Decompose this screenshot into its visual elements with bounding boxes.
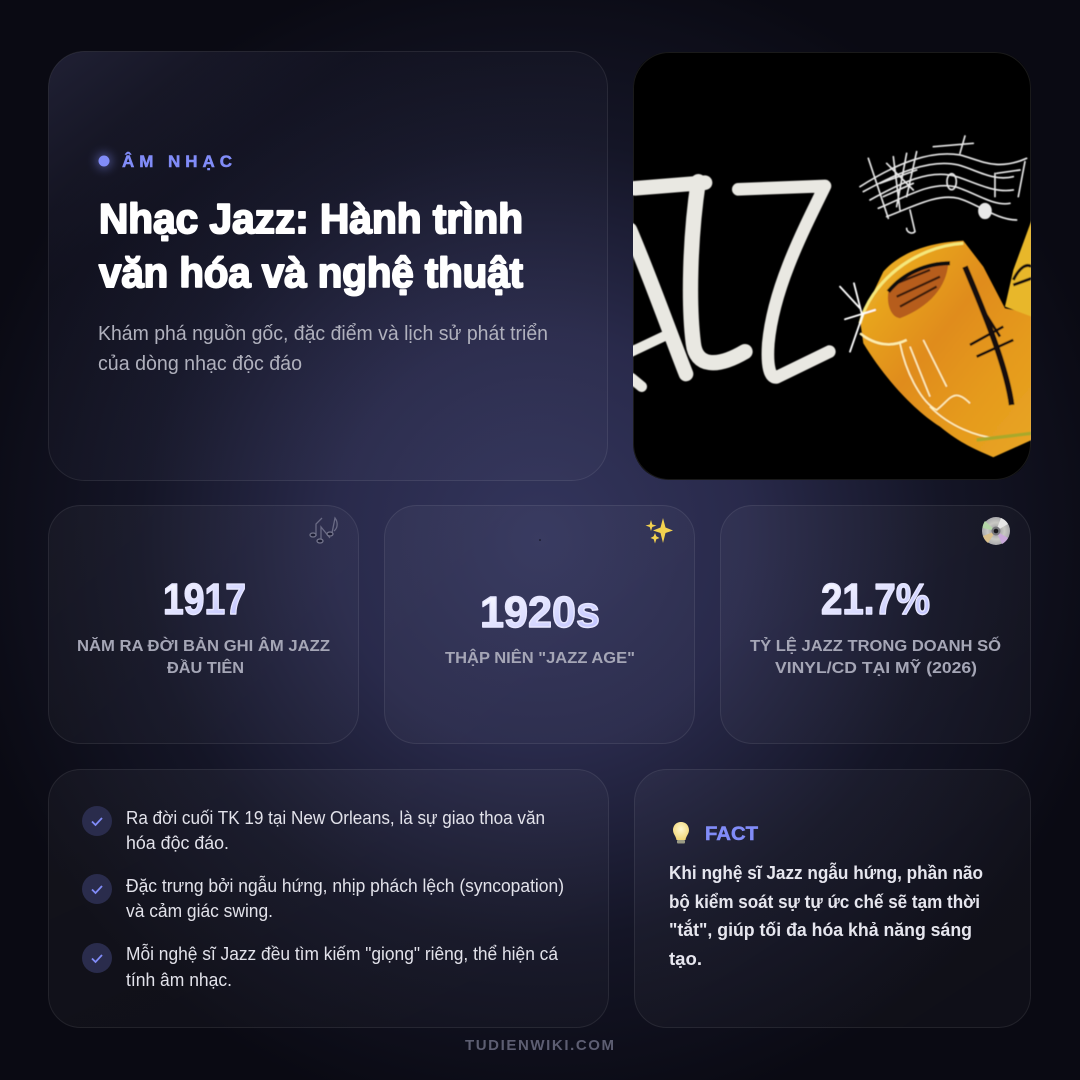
stat label: THẬP NIÊN "JAZZ AGE" <box>445 648 635 667</box>
stat label: VINYL/CD TẠI MỸ (2026) <box>775 657 977 677</box>
stat label <box>77 636 330 677</box>
subtitle: của dòng nhạc độc đáo <box>98 353 302 375</box>
panel: stat 1920s <box>384 506 694 744</box>
icon: sparkles <box>646 518 673 544</box>
list item 2: Đặc trưng bởi ngẫu hứng, nhịp phách lệch (syncopation) <box>126 875 564 896</box>
fact text: bộ kiểm soát sự tự ức chế sẽ tạm thời <box>669 892 980 912</box>
title <box>99 195 523 296</box>
sparkle <box>840 283 875 352</box>
tiny speck <box>539 539 541 541</box>
list item 3: tính âm nhạc. <box>126 970 232 990</box>
panel: stat 21.7% <box>720 506 1030 744</box>
image panel border <box>634 52 1030 480</box>
fact heading: FACT <box>705 824 758 845</box>
stat label: TỶ LỆ JAZZ TRONG DOANH SỐ <box>750 635 1001 655</box>
stat value: 21.7% <box>821 575 930 624</box>
stat value: 1920s <box>480 588 600 637</box>
icon: light bulb <box>673 822 689 844</box>
list item 2 <box>82 874 564 921</box>
panel: stat 1917 <box>48 506 358 744</box>
icon: musical notes <box>310 518 337 543</box>
stat label <box>750 635 1001 677</box>
list item 1 <box>82 806 545 853</box>
stat value: 1917 <box>163 575 246 624</box>
fact text: Khi nghệ sĩ Jazz ngẫu hứng, phần não <box>669 862 983 883</box>
subtitle <box>98 323 548 375</box>
panel: jazz illustration <box>630 52 1032 480</box>
fact text: "tắt", giúp tối đa hóa khả năng sáng <box>669 919 972 940</box>
saxophone bell <box>860 220 1032 457</box>
panel: fact <box>634 770 1030 1028</box>
lettering: ALZ <box>630 182 829 387</box>
footer source: TUDIENWIKI.COM <box>465 1037 614 1054</box>
stat label: NĂM RA ĐỜI BẢN GHI ÂM JAZZ <box>77 636 330 655</box>
fact text <box>669 862 983 969</box>
list item 1: hóa độc đáo. <box>126 833 229 853</box>
category tag: ÂM NHẠC <box>122 152 232 171</box>
list item 3: Mỗi nghệ sĩ Jazz đều tìm kiếm "giọng" riêng, thể hiện cá <box>126 943 559 964</box>
list item 2: và cảm giác swing. <box>126 901 273 921</box>
stat label: ĐẦU TIÊN <box>167 658 244 677</box>
subtitle: Khám phá nguồn gốc, đặc điểm và lịch sử phát triển <box>98 323 548 345</box>
list item 3 <box>82 943 559 990</box>
fact text: tạo. <box>669 949 702 969</box>
music staff <box>860 136 1027 233</box>
panel: hero intro <box>48 52 608 480</box>
icon: compact disc <box>982 517 1010 545</box>
list item 1: Ra đời cuối TK 19 tại New Orleans, là sự giao thoa văn <box>126 808 545 828</box>
panel: key points list <box>48 770 608 1028</box>
title: Nhạc Jazz: Hành trình <box>99 195 523 242</box>
title: văn hóa và nghệ thuật <box>99 249 523 296</box>
